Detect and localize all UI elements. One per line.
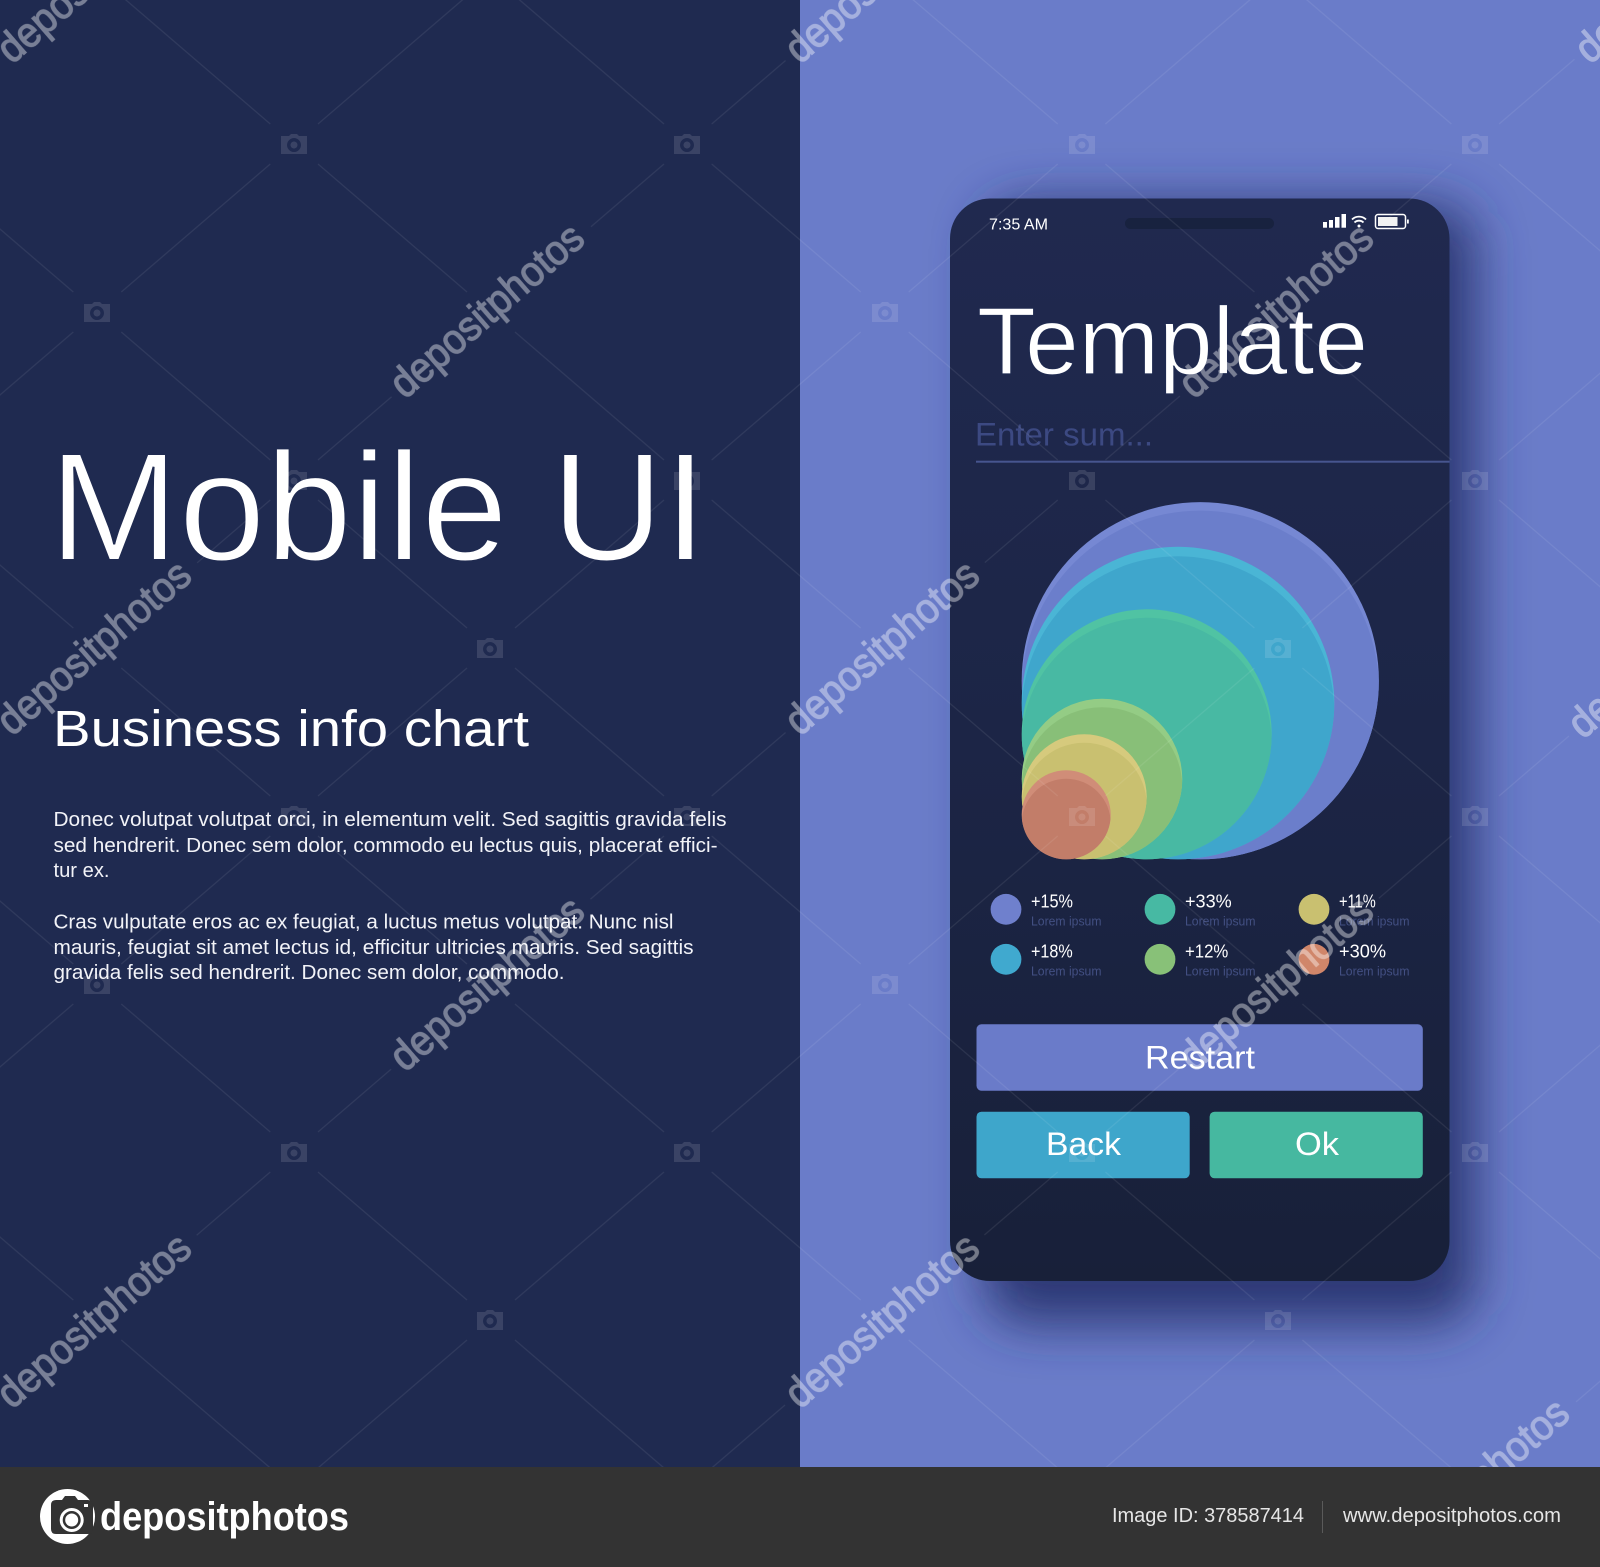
watermark text repeated diagonally: depositphotos	[775, 550, 988, 744]
chart: nested bubble chart	[1020, 500, 1380, 869]
paragraph one	[54, 808, 726, 882]
paragraph two	[54, 910, 694, 984]
bubble: +33% green	[1020, 608, 1274, 868]
watermark text repeated diagonally: depositphotos	[1169, 886, 1382, 1080]
watermark text repeated diagonally: depositphotos	[775, 1223, 988, 1417]
legend item +11%	[1299, 892, 1410, 929]
footer background	[0, 1467, 1600, 1567]
input placeholder: Enter sum: Enter sum...	[975, 416, 1153, 453]
paragraph one: sed hendrerit. Donec sem dolor, commodo eu lectus quis, placerat effici-	[54, 834, 718, 857]
input underline	[976, 461, 1450, 463]
bubble: +30% red	[1022, 770, 1111, 860]
legend item +15%: +15%	[1031, 892, 1073, 912]
paragraph two: gravida felis sed hendrerit. Donec sem dolor, commodo.	[54, 961, 564, 984]
legend item +30%: +30%	[1339, 942, 1386, 962]
watermark text repeated diagonally: depositphotos	[1169, 213, 1382, 407]
paragraph one: Donec volutpat volutpat orci, in elementum velit. Sed sagittis gravida felis	[54, 808, 726, 831]
icon: signal bars	[1323, 214, 1346, 228]
button: Restart	[976, 1024, 1423, 1091]
bubble: +18% blue	[1020, 545, 1336, 869]
legend item +18%	[991, 942, 1102, 978]
legend item +15%: Lorem ipsum	[1031, 915, 1102, 929]
footer separator	[1322, 1501, 1323, 1533]
legend item +12%: Lorem ipsum	[1185, 964, 1256, 978]
title: Mobile UI: Mobile UI	[49, 421, 707, 593]
footer bar	[0, 1467, 1600, 1567]
icon: wifi	[1352, 217, 1366, 228]
status bar time: 7:35 AM	[989, 216, 1048, 233]
text block: description paragraphs	[54, 808, 726, 984]
subtitle: Business info chart: Business info chart	[53, 700, 529, 757]
image ID text: Image ID: 378587414	[1112, 1505, 1304, 1527]
legend item +11%: +11%	[1339, 892, 1376, 912]
legend item +11%: Lorem ipsum	[1339, 915, 1410, 929]
phone notch	[1125, 218, 1274, 229]
legend item +33%: Lorem ipsum	[1185, 915, 1256, 929]
button: Ok	[1210, 1112, 1423, 1178]
panel: left navy background	[0, 0, 800, 1467]
legend item +33%	[1145, 892, 1256, 929]
legend item +15%	[991, 892, 1102, 929]
icon: depositphotos camera logo	[40, 1489, 95, 1544]
paragraph one: tur ex.	[54, 859, 110, 882]
watermark camera icons	[84, 134, 1488, 1330]
legend item +30%	[1299, 942, 1410, 978]
bubble: +11% yellow	[1020, 733, 1148, 868]
bubble: +12% light green	[1020, 697, 1184, 868]
watermark text repeated diagonally: depositphotos	[380, 213, 593, 407]
button: Ok: Ok	[1295, 1125, 1340, 1162]
legend item +18%: +18%	[1031, 942, 1073, 962]
button: Back: Back	[1046, 1125, 1122, 1162]
legend item +18%: Lorem ipsum	[1031, 964, 1102, 978]
button: Restart: Restart	[1145, 1038, 1255, 1075]
panel: right periwinkle background	[800, 0, 1600, 1467]
phone heading: Template: Template	[977, 288, 1368, 395]
icon: battery	[1376, 214, 1409, 228]
legend item +30%: Lorem ipsum	[1339, 964, 1410, 978]
legend item +12%	[1145, 942, 1256, 978]
paragraph two: mauris, feugiat sit amet lectus id, efficitur ultricies mauris. Sed sagittis	[54, 936, 694, 959]
legend item +33%: +33%	[1185, 892, 1232, 912]
watermark text repeated diagonally: depositphotos	[380, 886, 593, 1080]
legend	[991, 892, 1410, 978]
button: Back	[976, 1112, 1190, 1178]
logo wordmark: depositphotos	[100, 1495, 349, 1539]
phone drop shadow	[985, 205, 1475, 1323]
website URL text: www.depositphotos.com	[1342, 1505, 1561, 1527]
bubble: +15% purple	[1020, 500, 1380, 868]
phone body	[950, 198, 1450, 1281]
phone mockup	[950, 198, 1450, 1281]
legend item +12%: +12%	[1185, 942, 1228, 962]
paragraph two: Cras vulputate eros ac ex feugiat, a luctus metus volutpat. Nunc nisl	[54, 910, 674, 934]
